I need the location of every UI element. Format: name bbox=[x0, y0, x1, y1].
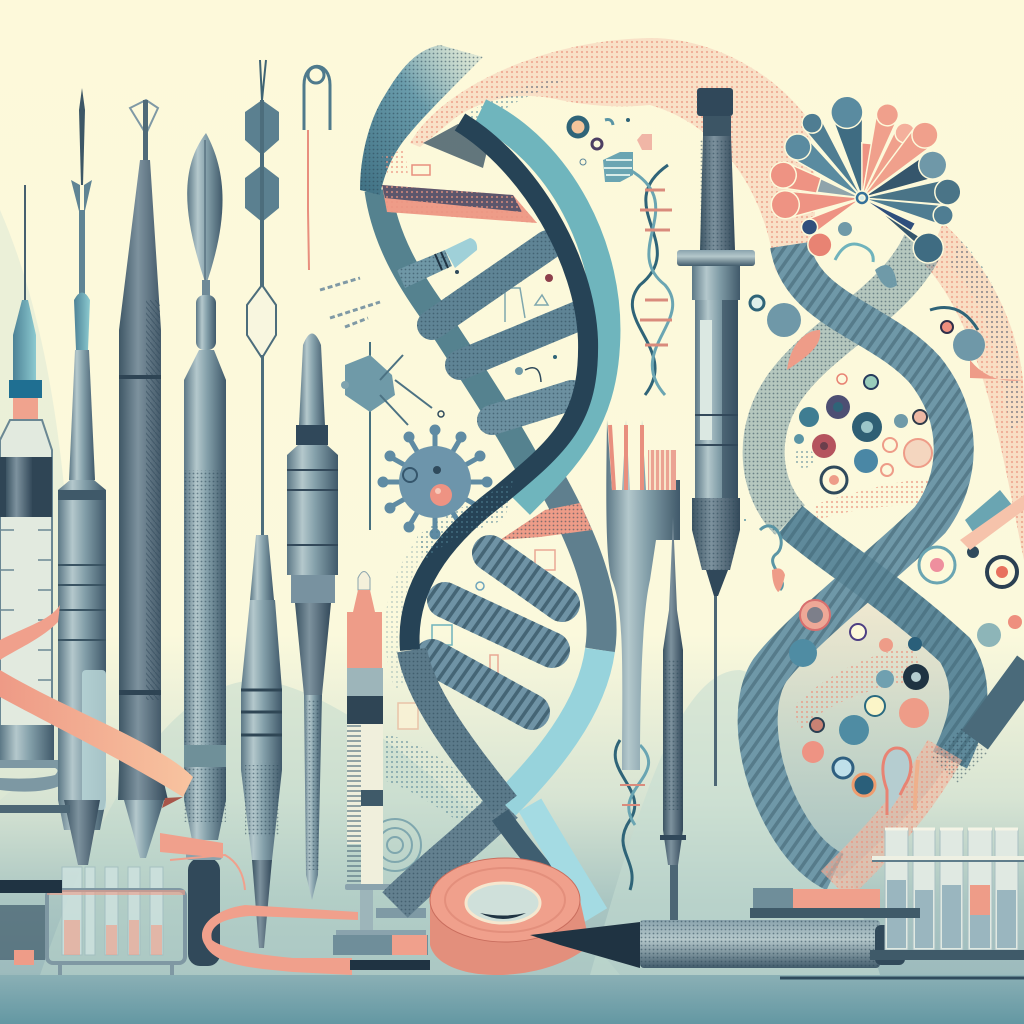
helix rungs bbox=[382, 124, 592, 712]
background hills bbox=[0, 210, 1024, 1024]
scattered glyphs near small helix bbox=[569, 118, 652, 182]
right test tube rack bbox=[750, 829, 1024, 978]
bottom horizontal instrument bbox=[530, 920, 905, 968]
instrument: leaf scalpel bbox=[184, 133, 226, 966]
peach dotted inner bands bbox=[793, 647, 925, 730]
upper rung 1 bbox=[432, 245, 548, 325]
lower rung 3 bbox=[432, 657, 532, 712]
cell dots in right helix bbox=[744, 296, 1024, 815]
dark lower diagonal bbox=[975, 665, 1024, 740]
peach middle rung bbox=[500, 503, 592, 540]
instrument: top pin bbox=[304, 66, 330, 270]
flower of round-tipped petals bbox=[767, 94, 962, 269]
small helix bbox=[615, 165, 673, 890]
dotted top swoosh of helix bbox=[360, 45, 483, 195]
dots under flower bbox=[835, 222, 897, 288]
peach ribbon left bbox=[0, 605, 358, 975]
tool on helix bbox=[397, 238, 477, 288]
icon: virus bbox=[380, 427, 490, 537]
icon: compass shape with staff bbox=[341, 342, 444, 530]
fork instrument bbox=[606, 420, 680, 770]
slim spike instrument bbox=[660, 517, 686, 920]
right helix bbox=[758, 240, 1024, 885]
lower loop fill bbox=[766, 590, 962, 880]
small scattered marks bbox=[320, 165, 557, 729]
upper rung 3 bbox=[492, 395, 572, 420]
navy and peach rung bbox=[382, 185, 537, 223]
tape roll bbox=[430, 858, 590, 975]
lower rung 1 bbox=[490, 553, 562, 604]
left helix strand upper bbox=[378, 190, 535, 478]
first strand bbox=[758, 245, 954, 872]
dotted peach swoosh behind helix bbox=[410, 38, 1024, 560]
bottom left instrument bars bbox=[333, 930, 430, 970]
crossing overlay bbox=[790, 520, 968, 760]
instrument: double-arrow needle bbox=[241, 60, 282, 948]
lower rung 2 bbox=[445, 600, 552, 650]
left helix strand lower bbox=[395, 470, 602, 905]
left test tube rack bbox=[0, 805, 185, 975]
wisp of teal dots bbox=[460, 77, 573, 125]
instrument: tall pen bbox=[118, 100, 168, 858]
dotted top rung bbox=[423, 124, 488, 168]
instrument: handle with bulb bbox=[287, 334, 338, 900]
instrument: left syringe bbox=[0, 185, 67, 792]
second strand bbox=[764, 240, 925, 520]
instrument: small syringe with peach cap bbox=[345, 572, 426, 930]
instrument: thin probe bbox=[58, 88, 106, 865]
upper rung 2 bbox=[460, 316, 578, 365]
main helix strand bbox=[410, 112, 606, 915]
large central syringe bbox=[677, 88, 755, 786]
